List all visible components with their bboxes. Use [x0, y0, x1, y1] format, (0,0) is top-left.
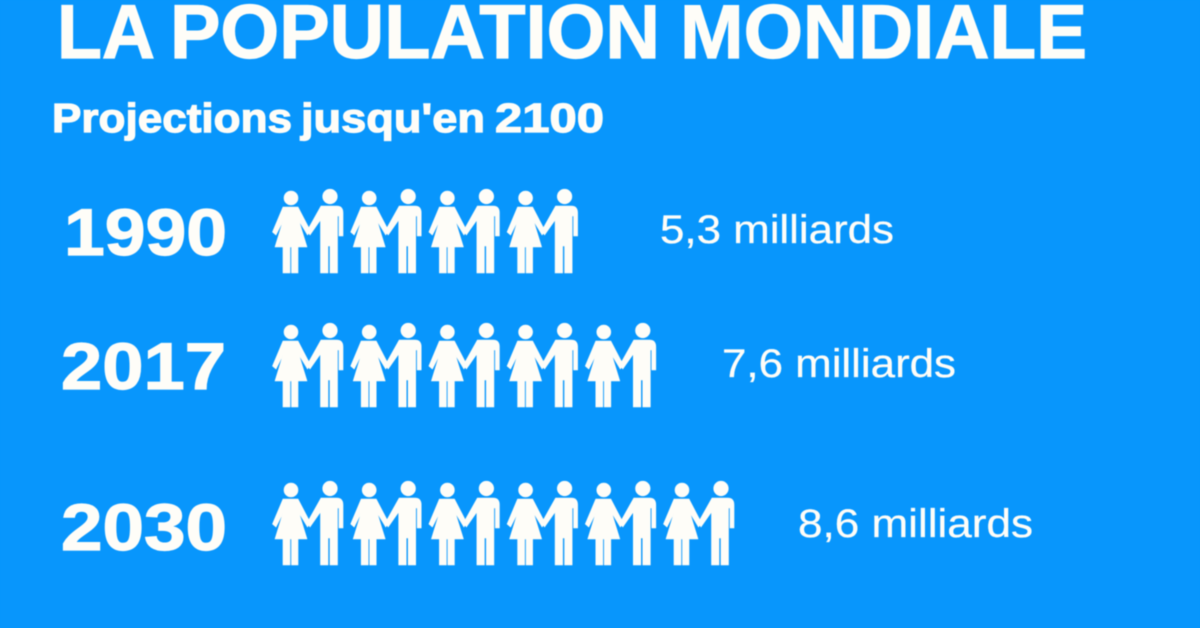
row: 1990	[64, 189, 894, 273]
pictogram: 12 people	[272, 481, 734, 565]
pictogram: 10 people	[272, 323, 656, 407]
value 2017: 7,6 milliards	[722, 342, 956, 386]
year 2017: 2017	[61, 329, 226, 403]
row: 2017	[61, 323, 956, 407]
subtitle: Projections	[52, 95, 292, 141]
year 2030: 2030	[61, 490, 227, 564]
year 1990: 1990	[64, 195, 227, 269]
pictogram: 8 people	[272, 189, 578, 273]
value 2030: 8,6 milliards	[798, 502, 1033, 546]
subtitle	[52, 95, 604, 141]
subtitle: jusqu'en	[300, 95, 485, 141]
row: 2030	[61, 481, 1033, 565]
value 1990: 5,3 milliards	[660, 208, 894, 252]
subtitle: 2100	[495, 95, 604, 141]
title	[57, 0, 1087, 75]
